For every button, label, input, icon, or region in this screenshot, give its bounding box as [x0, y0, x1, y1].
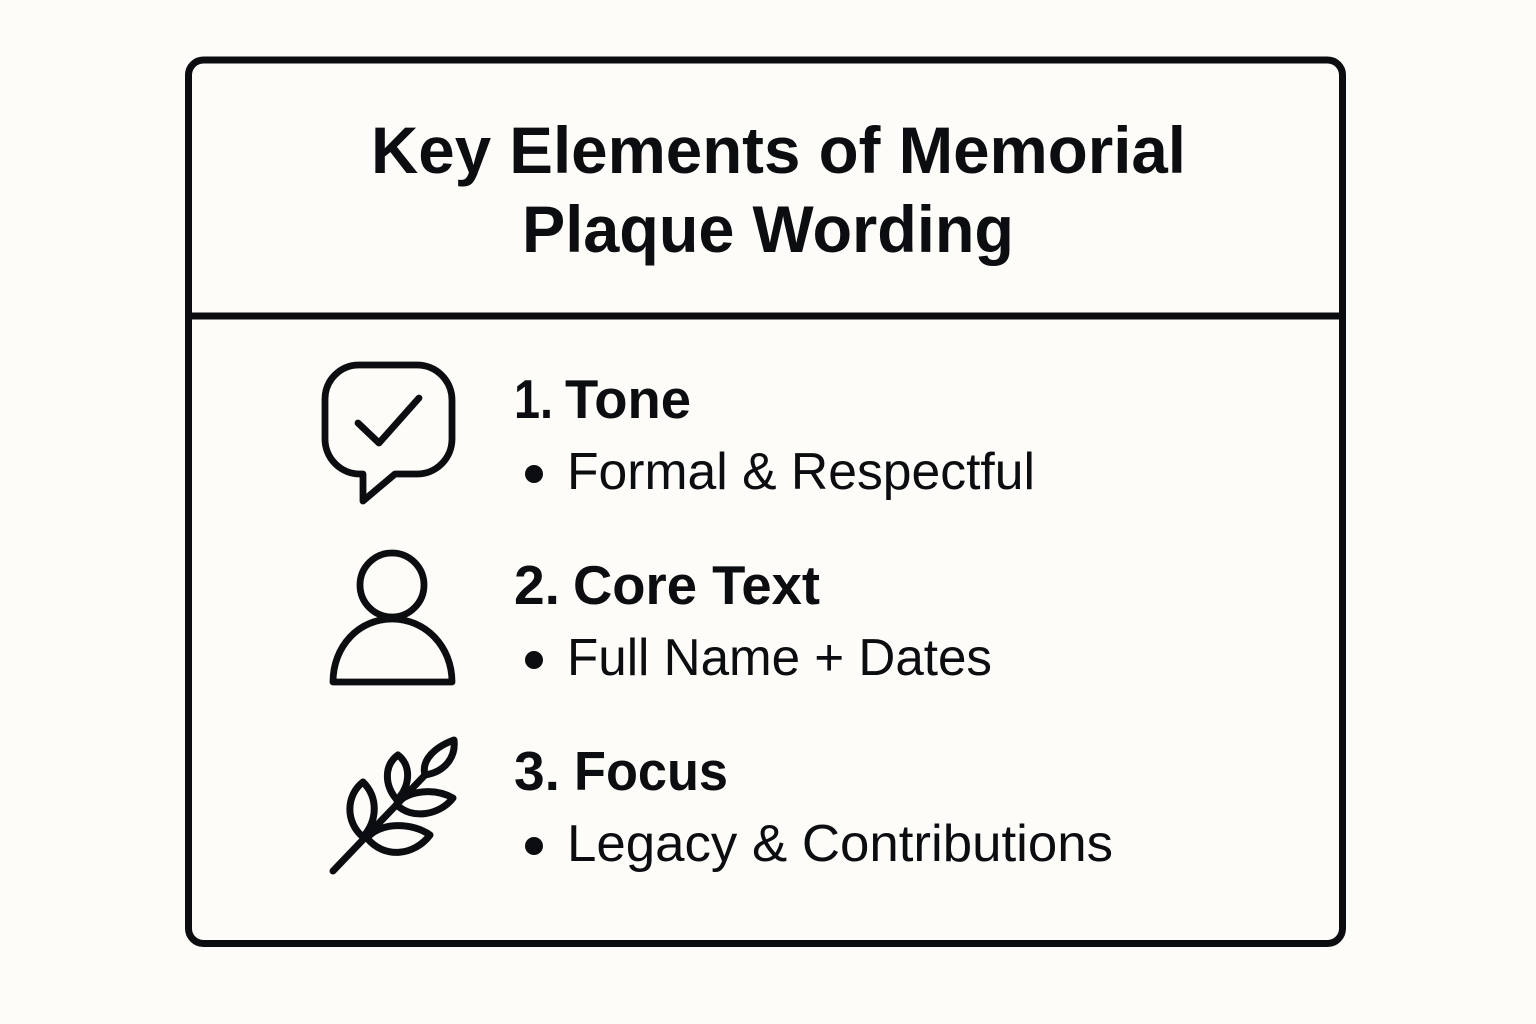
icon: person	[333, 553, 452, 682]
heading: tone: 1.	[514, 368, 553, 430]
item 3: focus	[333, 740, 1113, 873]
heading: core text: Core Text	[573, 554, 820, 616]
heading: focus	[514, 740, 728, 802]
title: Plaque Wording	[522, 192, 1014, 266]
bullet: formal and respectful: Formal & Respectful	[567, 443, 1035, 501]
heading: core text: 2.	[514, 554, 560, 616]
heading: focus: 3.	[514, 740, 560, 802]
bullet: full name and dates: Full Name + Dates	[567, 629, 992, 687]
title: Key Elements of Memorial	[371, 113, 1186, 187]
icon: laurel branch	[333, 740, 454, 871]
heading: tone: Tone	[565, 368, 691, 430]
title	[371, 113, 1186, 266]
heading: focus: Focus	[574, 740, 728, 802]
item 2: core text	[333, 553, 992, 687]
bullet: legacy and contributions: Legacy & Contributions	[567, 815, 1113, 873]
icon: speech bubble with check mark	[325, 365, 452, 501]
panel: plaque wording card	[188, 60, 1342, 944]
item 1: tone	[325, 365, 1035, 501]
